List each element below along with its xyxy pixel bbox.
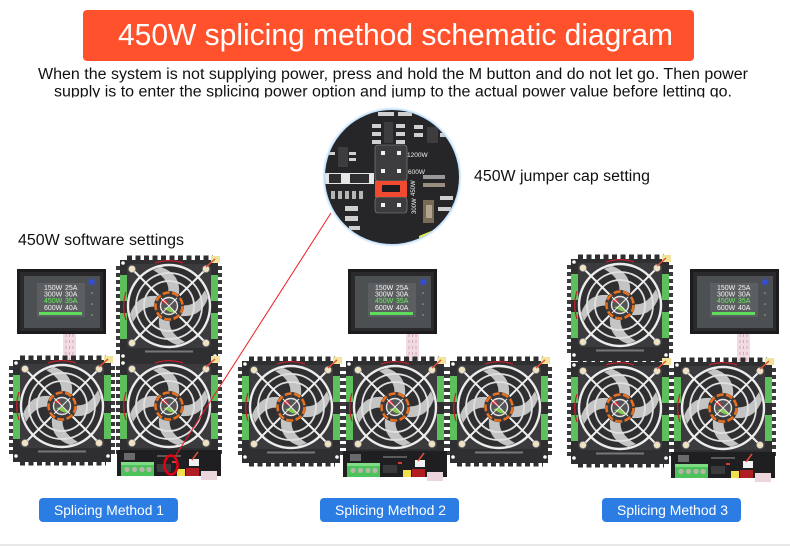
method 3 touch screen: 30A: [738, 292, 751, 298]
magnified jumper circle: [322, 107, 462, 250]
method 1 touch screen: 450W: [44, 298, 63, 305]
magnified jumper circle: 1200W: [407, 152, 428, 159]
magnified jumper circle: 600W: [408, 169, 426, 176]
method 2 assembly: [240, 269, 550, 481]
button: splicing method 2: Splicing Method 2: [335, 502, 446, 518]
method 3 controller module: [671, 358, 775, 482]
method 2 touch screen: [348, 269, 437, 334]
method 3 touch screen: 600W: [717, 305, 736, 312]
method 3 touch screen: 40A: [738, 305, 751, 312]
method 1 touch screen: [17, 269, 106, 334]
method 2 touch screen: 25A: [396, 285, 409, 292]
button: splicing method 1: [39, 498, 178, 522]
method 1 left module: [11, 356, 113, 463]
label: jumper cap setting: 450W jumper cap setting: [474, 168, 650, 185]
method 3 touch screen: 450W: [717, 298, 736, 305]
title banner: 450W splicing method schematic diagram: [118, 17, 673, 52]
method 1 assembly: [11, 256, 221, 480]
method 3 lower module: [569, 358, 671, 465]
method 3 top module: [569, 255, 671, 362]
instruction text: When the system is not supplying power, press and hold the M button and do not let go. Then power: [38, 66, 748, 83]
method 2 touch screen: 35A: [396, 298, 409, 305]
method 1 touch screen: 150W: [44, 285, 63, 292]
method 2 right module: [448, 357, 550, 464]
red highlight ring: [164, 456, 178, 474]
method 2 touch screen: 300W: [375, 292, 394, 298]
label: software settings: 450W software settings: [18, 232, 184, 249]
red pointer line to jumper: [176, 213, 331, 455]
method 1 touch screen: 30A: [65, 292, 78, 298]
method 2 touch screen: 450W: [375, 298, 394, 305]
magnified jumper circle: 450W: [411, 180, 417, 196]
magnified jumper circle: 300W: [412, 198, 418, 214]
button: splicing method 3: [602, 498, 741, 522]
method 2 touch screen: 40A: [396, 305, 409, 312]
method 1 touch screen: 25A: [65, 285, 78, 292]
method 2 left module: [240, 357, 342, 464]
method 3 touch screen: 25A: [738, 285, 751, 292]
bottom band: [0, 544, 790, 546]
title banner: [83, 10, 694, 61]
method 2 touch screen: 30A: [396, 292, 409, 298]
button: splicing method 1: Splicing Method 1: [54, 502, 164, 518]
button: splicing method 3: Splicing Method 3: [617, 502, 728, 518]
method 1 ribbon cable: [63, 334, 76, 363]
method 3 touch screen: 150W: [717, 285, 736, 292]
method 3 touch screen: 35A: [738, 298, 751, 305]
method 1 touch screen: 300W: [44, 292, 63, 298]
method 2 touch screen: 150W: [375, 285, 394, 292]
method 2 ribbon cable: [406, 334, 419, 363]
method 1 touch screen: 40A: [65, 305, 78, 312]
method 3 ribbon cable: [737, 334, 750, 363]
method 3 touch screen: 300W: [717, 292, 736, 298]
method 3 assembly: [569, 255, 779, 482]
instruction text: supply is to enter the splicing power option and jump to the actual power value before letting go.: [54, 84, 732, 100]
method 1 touch screen: 600W: [44, 305, 63, 312]
method 1 touch screen: 35A: [65, 298, 78, 305]
instruction text: [38, 68, 748, 98]
button: splicing method 2: [320, 498, 459, 522]
method 3 touch screen: [690, 269, 779, 334]
method 1 controller module: [117, 356, 221, 480]
method 2 controller module: [343, 357, 447, 481]
method 2 touch screen: 600W: [375, 305, 394, 312]
method 1 top module: [118, 256, 220, 363]
